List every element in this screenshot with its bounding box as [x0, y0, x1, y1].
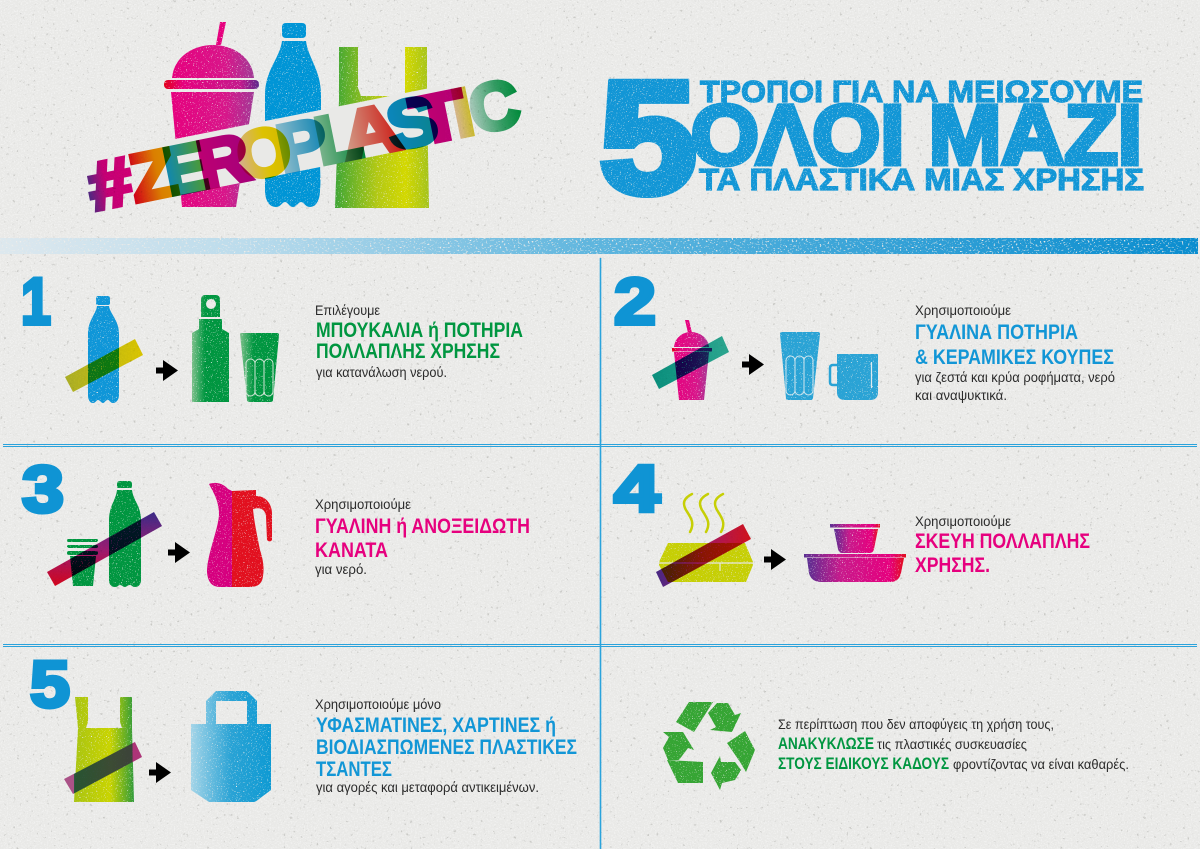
text block 3: για νερό. — [315, 561, 367, 577]
icon: jug — [207, 483, 272, 587]
text block 3: ΓΥΑΛΙΝΗ ή ΑΝΟΞΕΙΔΩΤΗ — [315, 515, 530, 538]
icon: hero shopping bag — [335, 47, 429, 208]
recycling text: τις πλαστικές συσκευασίες — [877, 736, 1027, 752]
number 5: 5 — [30, 647, 70, 721]
icon: hero bottle — [265, 23, 321, 207]
text block 1: για κατανάλωση νερού. — [316, 364, 447, 380]
text block 4 — [915, 513, 1090, 577]
logo: #zeroplastic — [81, 22, 526, 226]
title — [600, 50, 1144, 226]
title: ΟΛΟΙ ΜΑΖΙ — [691, 88, 1142, 182]
number 1: 1 — [21, 264, 51, 338]
recycling text: ΑΝΑΚΥΚΛΩΣΕ — [778, 734, 874, 753]
arrow — [149, 762, 171, 783]
hashtag lettering: T — [404, 75, 472, 160]
blue brushed band — [0, 238, 1198, 254]
hashtag lettering: Z — [123, 134, 183, 217]
recycling text — [778, 716, 1129, 773]
text block 5 — [315, 696, 577, 795]
icon: mug — [830, 354, 878, 400]
icon: reusable glass — [240, 333, 279, 402]
icon: cup and bottle crossed — [47, 481, 162, 587]
hashtag lettering: A — [334, 88, 408, 175]
icon: reusable flask — [192, 295, 229, 402]
text block 1: ΜΠΟΥΚΑΛΙΑ ή ΠΟΤΗΡΙΑ — [316, 319, 523, 342]
arrow — [764, 549, 786, 570]
hashtag lettering: # — [81, 143, 139, 226]
text block 5: για αγορές και μεταφορά αντικειμένων. — [316, 779, 539, 795]
hashtag lettering: C — [462, 64, 526, 149]
text block 2: για ζεστά και κρύα ροφήματα, νερό — [915, 369, 1115, 385]
icon: recycling symbol — [663, 702, 755, 790]
text block 2: ΓΥΑΛΙΝΑ ΠΟΤΗΡΙΑ — [915, 321, 1078, 344]
icon: plastic bag crossed — [64, 697, 142, 802]
icon: reusable containers — [804, 524, 906, 582]
hashtag lettering: S — [380, 81, 444, 165]
text block 3 — [315, 496, 530, 577]
text block 1: Επιλέγουμε — [315, 302, 380, 318]
hashtag lettering: O — [230, 110, 298, 196]
hashtag lettering: L — [308, 96, 368, 180]
panel: recycling — [663, 702, 1129, 790]
text block 2: και αναψυκτικά. — [915, 387, 1007, 403]
text block 4: ΧΡΗΣΗΣ. — [915, 554, 990, 577]
hashtag lettering: I — [446, 74, 480, 152]
icon: takeaway box crossed — [656, 494, 753, 587]
title: 5 — [600, 50, 696, 226]
text block 1: ΠΟΛΛΑΠΛΗΣ ΧΡΗΣΗΣ — [316, 340, 500, 363]
paper strip behind hashtag — [150, 85, 445, 201]
recycling text: Σε περίπτωση που δεν αποφύγεις τη χρήση τους, — [778, 716, 1054, 732]
text block 3: Χρησιμοποιούμε — [315, 496, 411, 512]
panel 5: bags — [30, 647, 577, 802]
number 3: 3 — [22, 452, 64, 526]
text block 5: ΤΣΑΝΤΕΣ — [316, 758, 392, 781]
arrow — [742, 354, 764, 375]
grid lines — [3, 258, 1197, 849]
text block 5: ΒΙΟΔΙΑΣΠΩΜΕΝΕΣ ΠΛΑΣΤΙΚΕΣ — [316, 736, 577, 759]
title: ΤΡΟΠΟΙ ΓΙΑ ΝΑ ΜΕΙΩΣΟΥΜΕ — [700, 74, 1143, 109]
panel 4: food containers — [614, 451, 1090, 587]
number 4: 4 — [614, 451, 660, 525]
text block 3: ΚΑΝΑΤΑ — [315, 539, 388, 562]
hashtag lettering — [81, 64, 526, 226]
panel 3: jug — [22, 452, 530, 587]
icon: plastic bottle crossed — [65, 296, 143, 403]
text block 4: Χρησιμοποιούμε — [915, 513, 1011, 529]
panel 1: bottles and glasses — [21, 264, 523, 403]
icon: glass — [780, 332, 820, 400]
text block 1 — [315, 302, 523, 380]
text block 2: & ΚΕΡΑΜΙΚΕΣ ΚΟΥΠΕΣ — [915, 346, 1114, 369]
icon: plastic cup crossed — [652, 320, 729, 400]
text block 4: ΣΚΕΥΗ ΠΟΛΛΑΠΛΗΣ — [915, 530, 1090, 553]
text block 2 — [915, 302, 1115, 403]
icon: hero cup — [164, 22, 259, 207]
icon: tote bag — [191, 691, 271, 802]
arrow — [156, 360, 178, 381]
hashtag lettering: R — [191, 119, 257, 204]
hashtag lettering: P — [270, 103, 334, 188]
text block 2: Χρησιμοποιούμε — [915, 302, 1011, 318]
recycling text: ΣΤΟΥΣ ΕΙΔΙΚΟΥΣ ΚΑΔΟΥΣ — [778, 754, 949, 773]
hashtag lettering: E — [157, 127, 214, 210]
title: ΤΑ ΠΛΑΣΤΙΚΑ ΜΙΑΣ ΧΡΗΣΗΣ — [699, 162, 1144, 197]
panel 2: cups and mugs — [614, 264, 1115, 403]
text block 5: Χρησιμοποιούμε μόνο — [315, 696, 441, 712]
text block 5: ΥΦΑΣΜΑΤΙΝΕΣ, ΧΑΡΤΙΝΕΣ ή — [316, 714, 556, 737]
number 2: 2 — [614, 264, 656, 338]
recycling text: φροντίζοντας να είναι καθαρές. — [953, 756, 1129, 772]
arrow — [168, 542, 190, 563]
